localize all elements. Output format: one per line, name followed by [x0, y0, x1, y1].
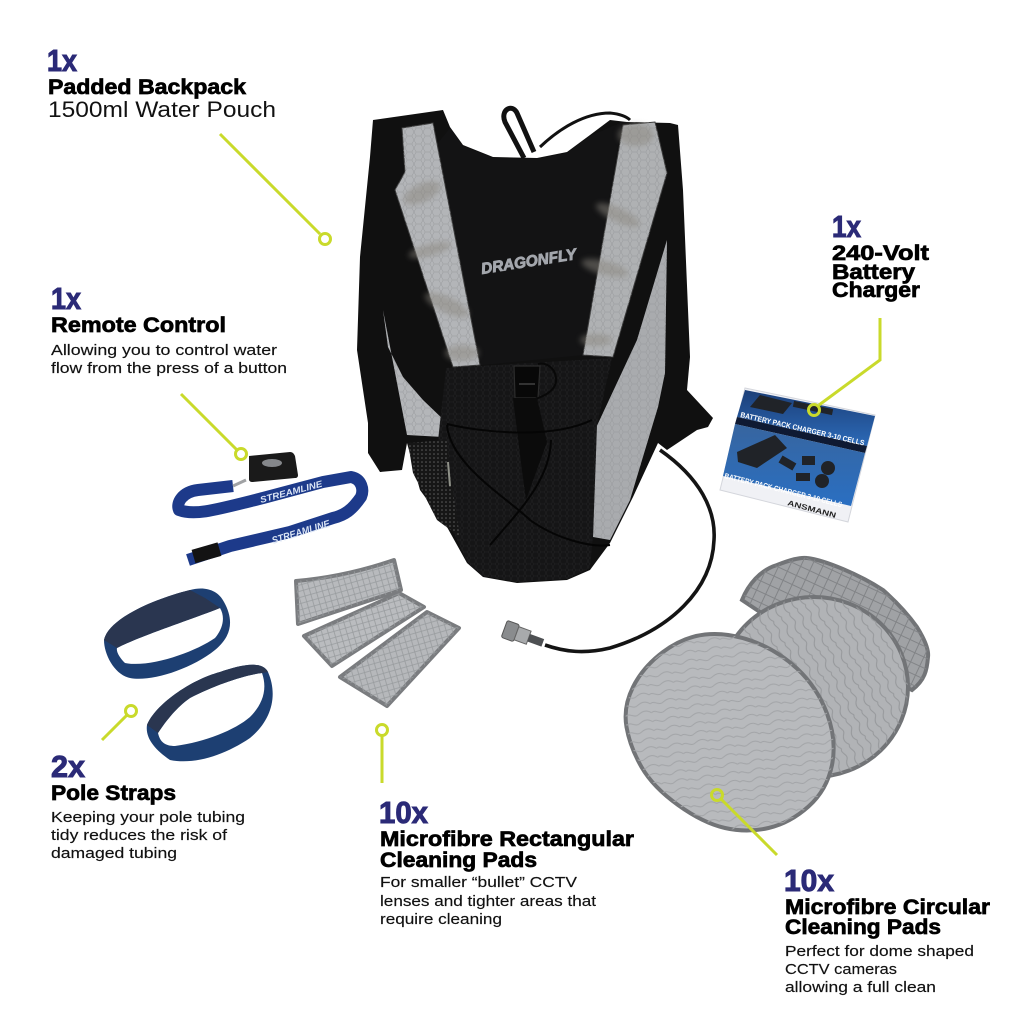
backpack lower body: [437, 358, 612, 582]
heading: Pole Straps: [51, 782, 176, 805]
leader line: pole straps: [102, 706, 136, 740]
illustration: hydration tube and connector: [501, 450, 714, 652]
illustration: pole straps: [104, 588, 273, 761]
heading: Padded Backpack: [48, 76, 246, 99]
description: Keeping your pole tubing: [51, 810, 245, 826]
heading: Remote Control: [51, 314, 226, 337]
backpack zip pull: [448, 462, 450, 486]
description: require cleaning: [380, 912, 502, 928]
text block: battery charger: [832, 209, 929, 302]
middle circular pad: [720, 597, 908, 777]
text block: rectangular pads: [379, 795, 634, 928]
lower pole strap: [147, 665, 273, 761]
heading: Charger: [832, 279, 920, 302]
quantity: 1x: [51, 281, 82, 316]
backpack top flap: [400, 122, 622, 368]
backpack drawcord: [447, 420, 610, 546]
charger label lower: BATTERY PACK CHARGER 3-10 CELLS: [724, 471, 843, 509]
leader line: remote control: [181, 394, 246, 460]
quantity: 1x: [47, 43, 78, 78]
heading: Battery: [832, 261, 915, 284]
heading: Cleaning Pads: [380, 849, 537, 872]
text block: circular pads: [784, 863, 990, 996]
backpack left reflective panel: [395, 123, 480, 367]
heading: Microfibre Circular: [785, 896, 990, 919]
lanyard strap: [178, 477, 362, 560]
backpack lower left panel: [383, 310, 447, 437]
illustration: circular cleaning pads: [626, 558, 928, 830]
backpack handle loop and top hose: [504, 108, 630, 158]
leader line: circular pads: [712, 790, 777, 855]
description: tidy reduces the risk of: [51, 828, 228, 844]
charger box upper blue face: [737, 390, 875, 446]
text block: pole straps: [51, 749, 245, 862]
leader line: charger: [808, 318, 880, 416]
leader line: rectangular pads: [376, 724, 388, 783]
description: For smaller “bullet” CCTV: [380, 875, 577, 891]
description: flow from the press of a button: [51, 361, 287, 377]
charger box white base: [720, 388, 875, 522]
backpack reflective shading: [400, 124, 654, 361]
pad two: [304, 593, 424, 666]
heading: 240-Volt: [832, 242, 929, 265]
quantity: 10x: [784, 863, 835, 898]
text block: remote control: [51, 281, 287, 377]
charger label upper: BATTERY PACK CHARGER 3-10 CELLS: [740, 410, 865, 448]
description: Allowing you to control water: [51, 343, 277, 359]
upper pole strap: [104, 588, 230, 679]
charger box lower blue face: [723, 424, 865, 506]
lanyard clip: [233, 480, 246, 486]
illustration: remote control and lanyard: [178, 452, 362, 563]
quantity: 2x: [51, 749, 86, 784]
illustration: battery charger box: [720, 388, 875, 522]
quantity: 10x: [379, 795, 429, 830]
pad three: [340, 612, 459, 706]
illustration: remote control and lanyard: STREAMLINE: [271, 519, 332, 547]
backpack silhouette: [357, 110, 713, 583]
front circular pad: [626, 634, 834, 830]
subheading: 1500ml Water Pouch: [48, 97, 276, 122]
remote control: [249, 452, 298, 482]
back circular pad: [742, 558, 928, 690]
lanyard branding: STREAMLINE: [259, 478, 324, 505]
description: allowing a full clean: [785, 980, 936, 996]
charger brand: ANSMANN: [786, 498, 837, 520]
description: lenses and tighter areas that: [380, 894, 596, 910]
description: CCTV cameras: [785, 962, 897, 978]
backpack brand logo: DRAGONFLY: [480, 246, 579, 278]
illustration: rectangular cleaning pads: [296, 560, 459, 706]
backpack mesh side pocket: [408, 440, 460, 537]
text block: padded backpack: [47, 43, 276, 122]
charger box dark band: [735, 417, 867, 453]
description: damaged tubing: [51, 846, 177, 862]
heading: Cleaning Pads: [785, 916, 941, 939]
pad one: [296, 560, 401, 624]
quantity: 1x: [832, 209, 862, 244]
charger product shapes: [737, 395, 835, 488]
leader line: backpack: [220, 134, 330, 244]
illustration: backpack: [357, 108, 713, 583]
backpack lower right panel: [593, 240, 667, 540]
backpack buckle: [513, 364, 556, 500]
backpack right reflective panel: [583, 122, 667, 357]
description: Perfect for dome shaped: [785, 944, 974, 960]
heading: Microfibre Rectangular: [380, 828, 634, 851]
